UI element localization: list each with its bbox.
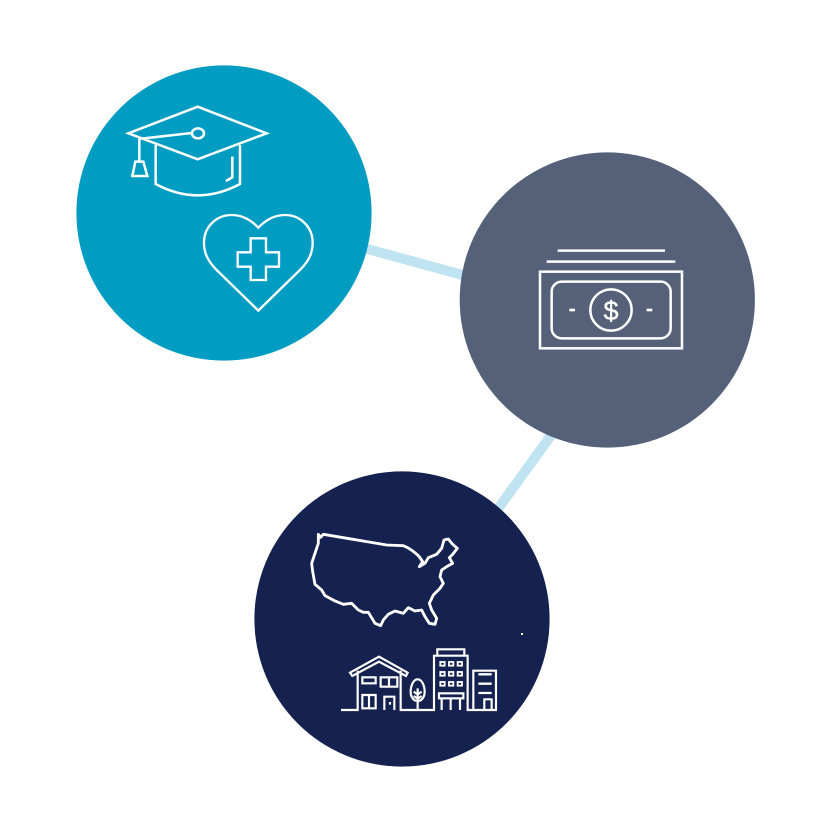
connector: slate circle to navy circle (492, 430, 555, 517)
panel: money circle (460, 152, 755, 448)
icon: graduation cap (128, 107, 267, 195)
connector: teal circle to slate circle (360, 247, 470, 277)
icon: dollar sign: $ (603, 296, 619, 326)
icon: stack of banknotes (540, 251, 682, 348)
icon: city buildings, house and tree (341, 649, 496, 710)
icon: heart with medical cross (204, 215, 313, 311)
small white dot (521, 633, 523, 635)
icon: map of the United States (312, 534, 457, 626)
panel: geography and community circle (254, 471, 550, 767)
panel: education and health circle (76, 65, 372, 361)
